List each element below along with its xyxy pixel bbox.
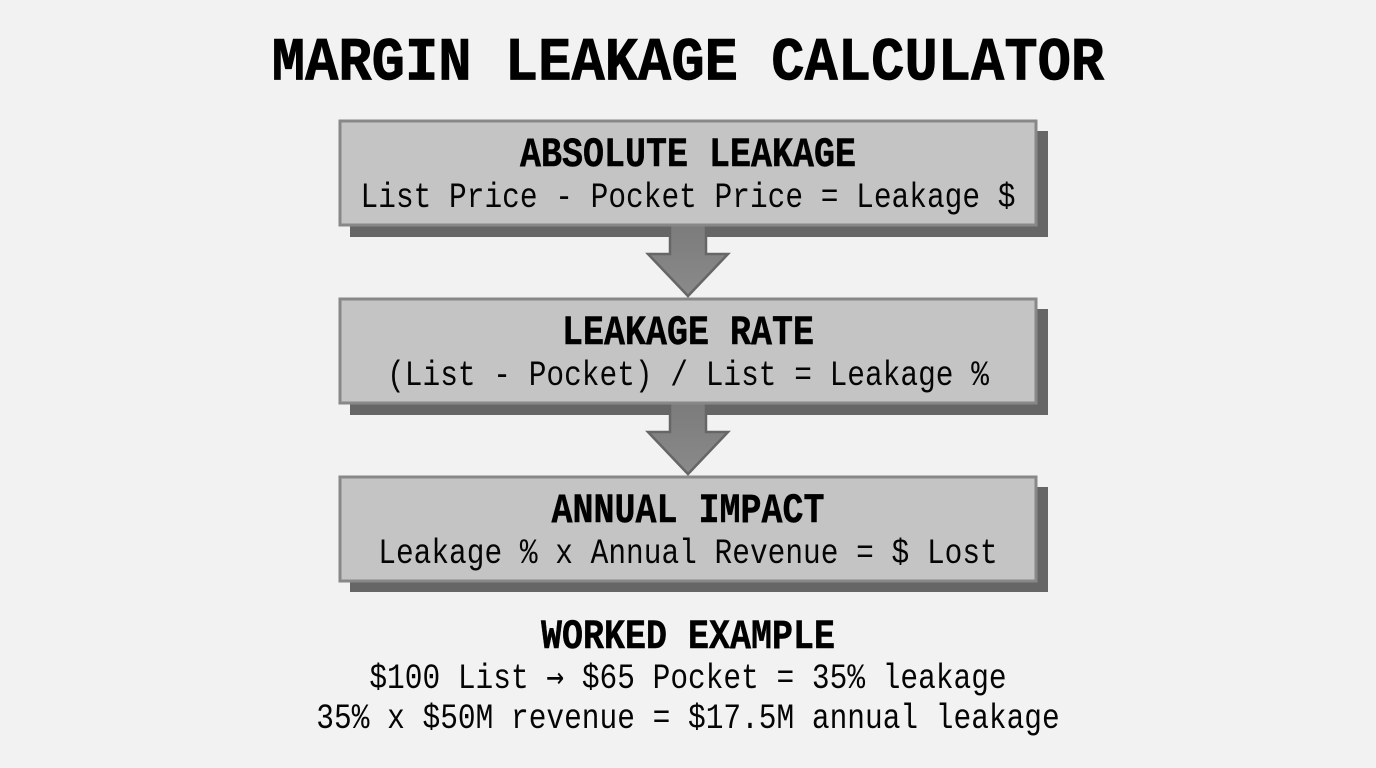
heading: absolute leakage: ABSOLUTE LEAKAGE [520, 131, 856, 179]
arrow: absolute leakage to leakage rate [648, 226, 728, 296]
example line 1: $100 List → $65 Pocket = 35% leakage [369, 655, 1007, 699]
worked example [316, 613, 1060, 739]
title: MARGIN LEAKAGE CALCULATOR [272, 28, 1104, 98]
panel: leakage rate [340, 299, 1048, 415]
formula: annual impact: Leakage % x Annual Revenue = $ Lost [378, 534, 998, 574]
heading: leakage rate: LEAKAGE RATE [562, 309, 814, 357]
heading: worked example: WORKED EXAMPLE [541, 613, 835, 661]
formula: leakage rate: (List - Pocket) / List = Leakage % [387, 356, 989, 396]
panel: annual impact [340, 477, 1048, 592]
panel: absolute leakage [340, 121, 1048, 237]
arrow: leakage rate to annual impact [648, 404, 728, 474]
formula: absolute leakage: List Price - Pocket Price = Leakage $ [361, 178, 1015, 218]
heading: annual impact: ANNUAL IMPACT [552, 487, 824, 535]
example line 2: 35% x $50M revenue = $17.5M annual leakage [316, 699, 1060, 739]
